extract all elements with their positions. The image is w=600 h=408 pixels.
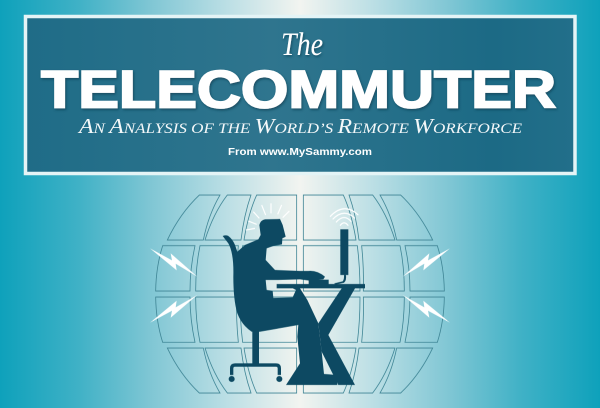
silhouette: person on chair at desk <box>223 219 365 385</box>
source line: From www.MySammy.com <box>228 146 372 158</box>
person and chair body <box>223 219 337 385</box>
globe grid <box>156 195 444 393</box>
chair pole <box>252 330 259 363</box>
chair base and wheels <box>232 365 279 375</box>
desk top <box>277 284 365 288</box>
subtitle: AN ANALYSIS OF THE WORLD’S REMOTE WORKFORCE <box>77 114 522 138</box>
icon: lightning bolts <box>150 248 450 323</box>
desk X frame <box>318 288 355 385</box>
illustration: telecommuter at globe <box>150 195 450 393</box>
monitor <box>340 229 348 275</box>
keyboard <box>309 280 329 284</box>
icon: idea rays <box>246 203 289 230</box>
icon: wifi waves <box>330 209 358 226</box>
title: The: The <box>281 27 323 63</box>
title: TELECOMMUTER: TELECOMMUTER <box>41 60 556 120</box>
title panel <box>26 16 575 174</box>
